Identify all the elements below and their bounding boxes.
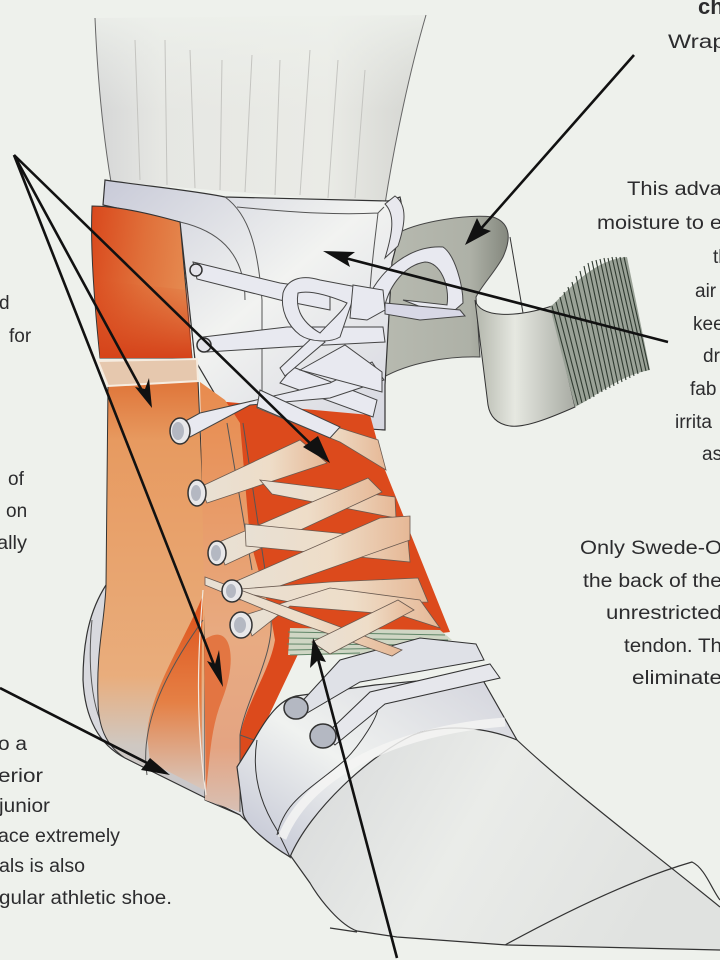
panel: upper orange panel xyxy=(92,206,192,358)
arrow: cuff lining xyxy=(323,251,668,342)
lace: bow loop right xyxy=(367,247,463,317)
laces: cream crossings xyxy=(200,392,440,656)
lace: bow loop left xyxy=(282,278,357,341)
text: right column lower: tendon. Th xyxy=(624,636,720,657)
arrow: strap xyxy=(465,55,634,245)
eyelets xyxy=(170,264,336,748)
text: right column middle: air xyxy=(695,281,717,302)
text: right column lower: eliminate xyxy=(632,668,720,689)
strap: front loop xyxy=(475,300,575,426)
text: left column middle: on xyxy=(6,501,27,522)
foot xyxy=(290,728,720,950)
text: right column lower: Only Swede-O xyxy=(580,538,720,559)
text: left column upper: for xyxy=(9,326,32,347)
sock xyxy=(90,0,430,204)
text: right column middle: dr xyxy=(703,346,720,367)
text: left column lower: ace extremely xyxy=(0,826,121,847)
text: right column lower xyxy=(580,538,720,689)
panel: upper white cuff xyxy=(103,180,402,430)
text: right column lower: the back of the xyxy=(583,571,720,592)
strap: hook fabric stripes xyxy=(550,257,650,407)
velcro strap xyxy=(380,216,650,426)
text: left column lower xyxy=(0,734,172,909)
text: right column top xyxy=(668,0,720,53)
text: right column middle: irrita xyxy=(675,412,712,433)
cuff loop xyxy=(385,196,404,258)
strap: ankle band xyxy=(98,359,198,386)
text: left column middle xyxy=(0,469,28,554)
arrow: toe lace area xyxy=(310,638,397,958)
panel: center cream stay xyxy=(200,382,275,812)
text: left column lower: als is also xyxy=(0,856,85,877)
brace heel outer edge xyxy=(83,585,290,857)
strap: back band xyxy=(380,216,508,378)
arrow: three pointers xyxy=(14,155,330,687)
panel: lower white instep xyxy=(237,675,517,857)
text: left column middle: of xyxy=(8,469,25,490)
text: right column top: Wrap xyxy=(668,32,720,53)
panel: orange heel curve xyxy=(147,595,204,790)
text: right column middle: fab xyxy=(690,379,716,400)
laces: upper white crossings and bow xyxy=(180,247,465,438)
text: right column middle: moisture to e xyxy=(597,213,720,234)
panel: lower orange side xyxy=(98,380,240,815)
text: right column lower: unrestricted xyxy=(606,603,720,624)
text: left column lower: gular athletic shoe. xyxy=(0,888,172,909)
arrow: heel xyxy=(0,688,170,775)
green tongue stripes xyxy=(287,628,452,655)
text: right column middle xyxy=(597,179,720,465)
toe outline and seam xyxy=(290,740,720,950)
panel: red lace area xyxy=(205,400,450,800)
text: left column upper xyxy=(0,293,32,347)
text: right column middle: This adva xyxy=(627,179,720,200)
laces: lower white straps xyxy=(296,638,500,745)
text: left column lower: junior xyxy=(0,796,51,817)
